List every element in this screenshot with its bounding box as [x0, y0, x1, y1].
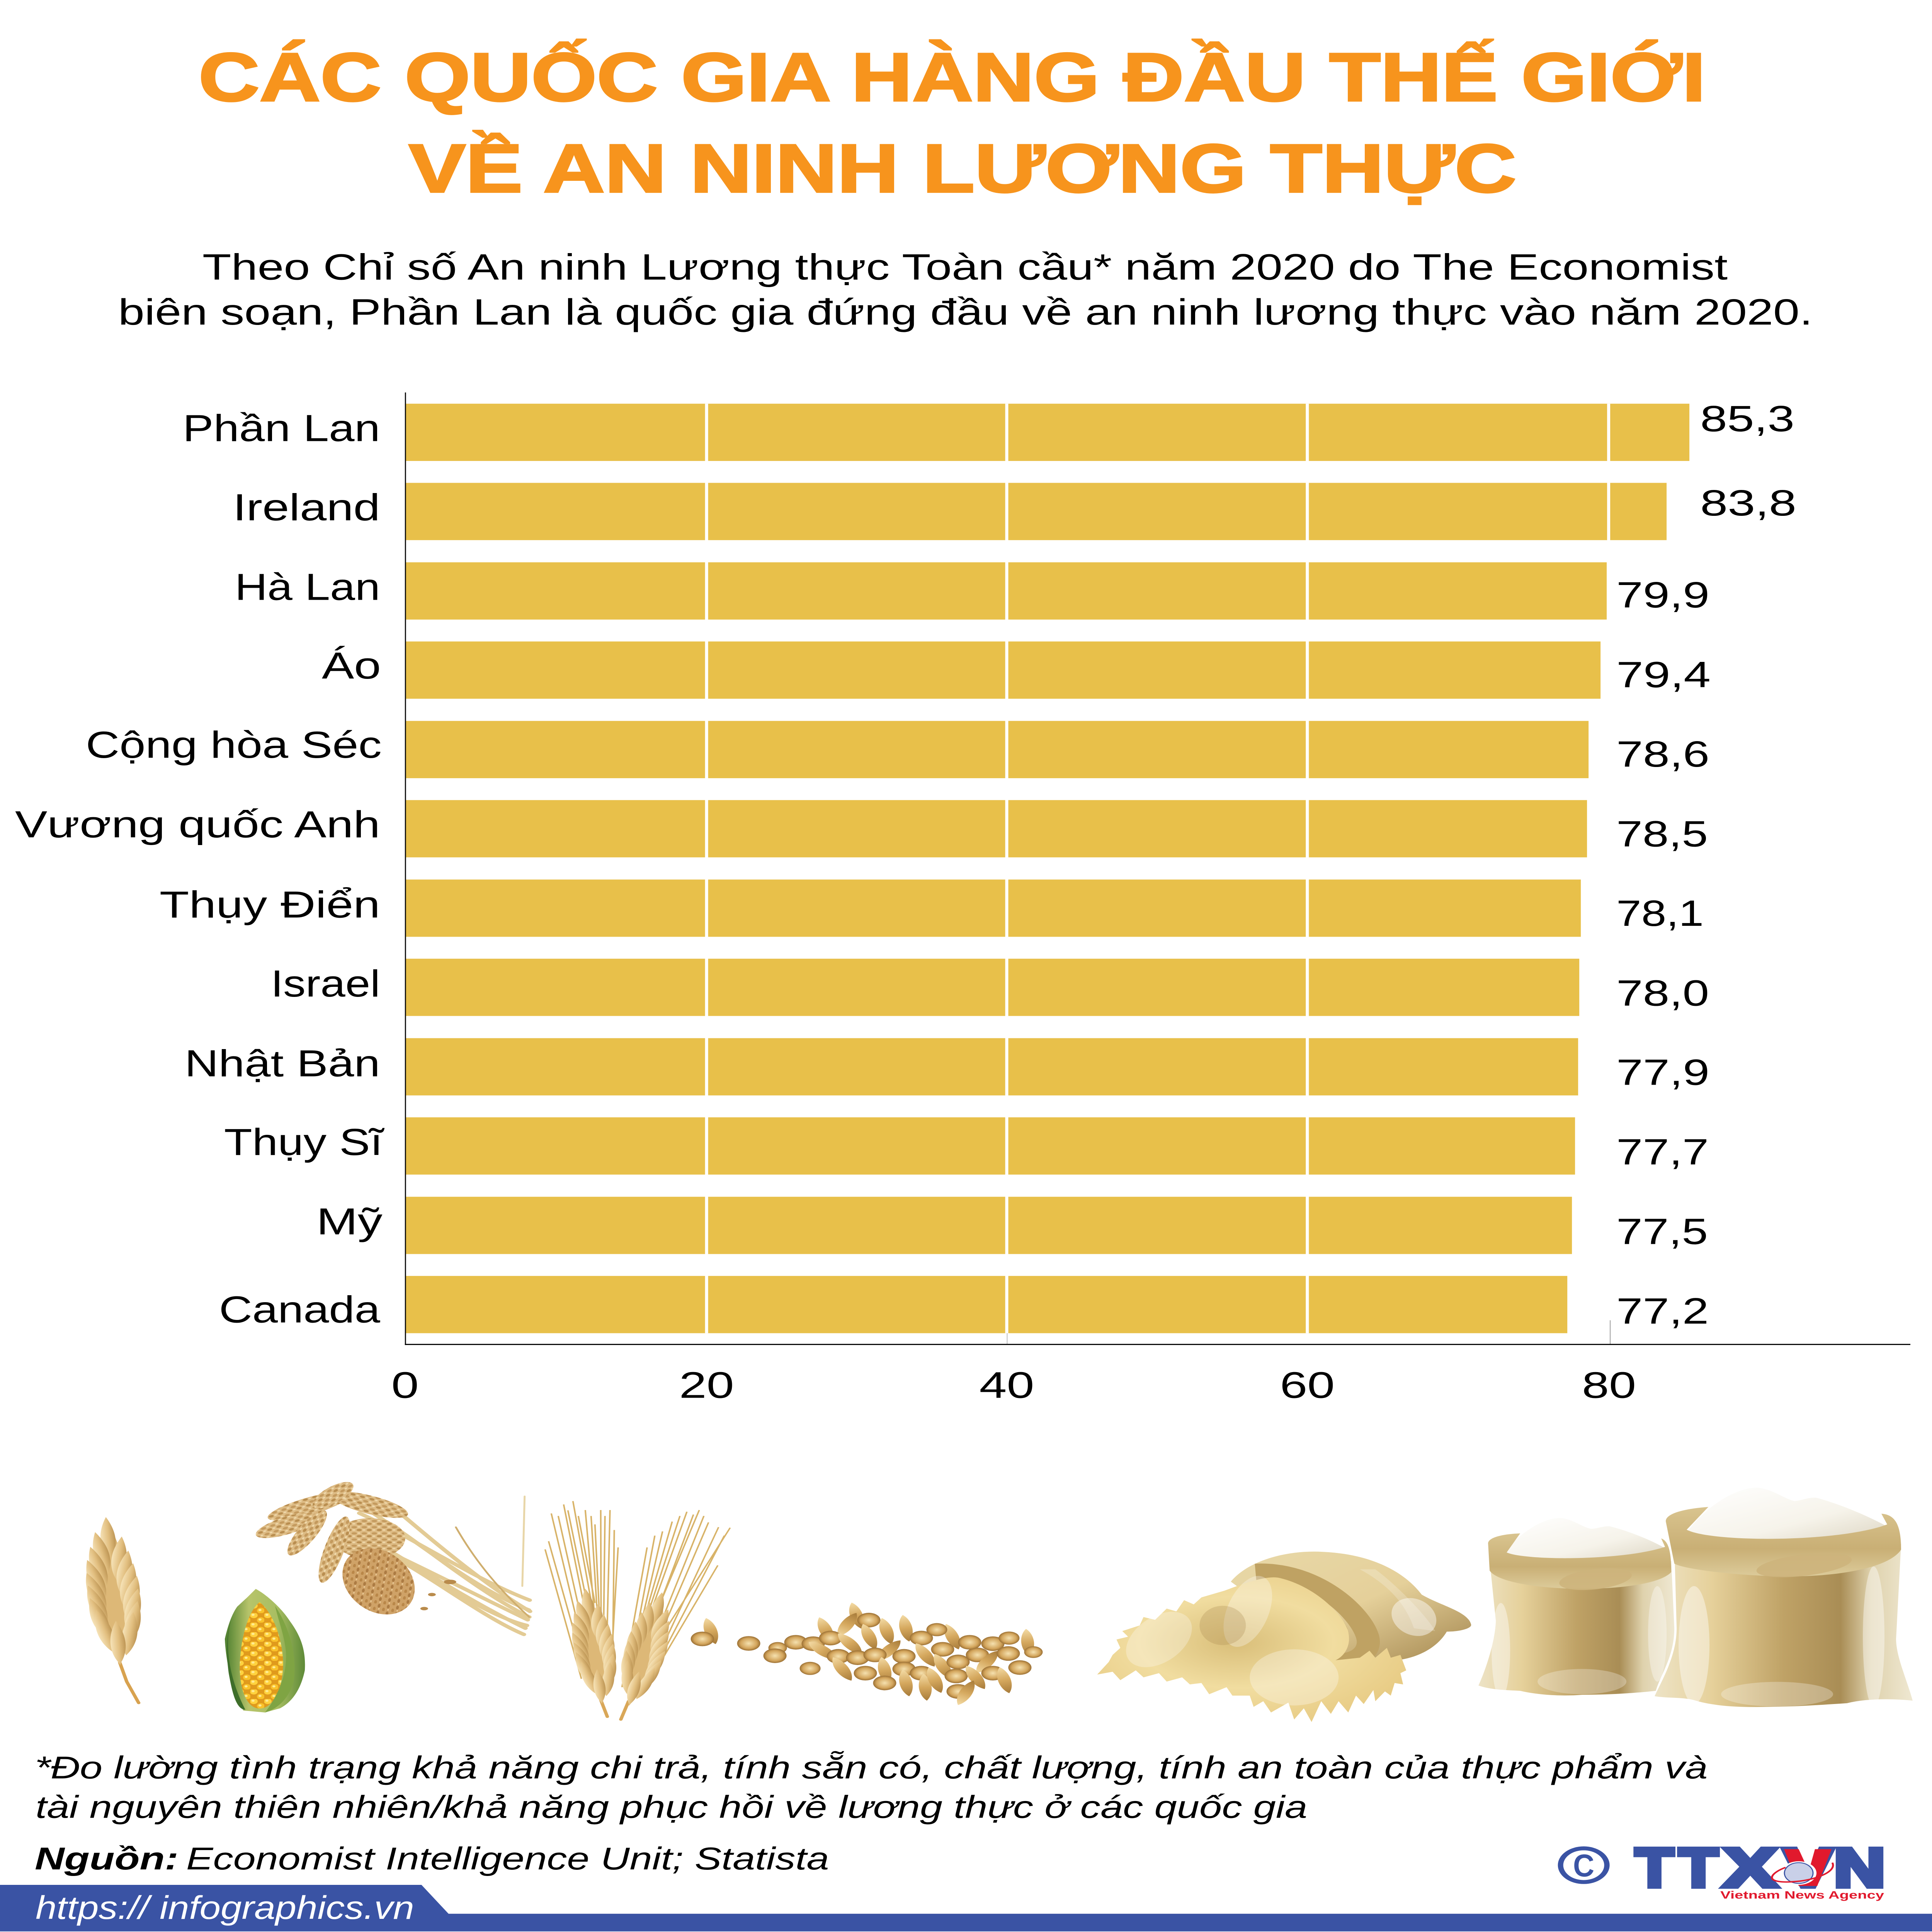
- x axis tick labels: 0: [391, 1365, 419, 1406]
- footer url: https:// infographics.vn: [36, 1889, 414, 1926]
- value labels: 78,5: [1616, 814, 1708, 854]
- country labels: Cộng hòa Séc: [86, 724, 382, 766]
- bar chart: food security index by country: [15, 393, 1910, 1406]
- footnote text block: *Đo lường tình trạng khả năng chi trả, tính sẵn có, chất lượng, tính an toàn của thực phẩm và: [35, 1750, 1708, 1785]
- country labels: Vương quốc Anh: [15, 803, 380, 845]
- country labels: [15, 407, 384, 1330]
- logo: TTXVN Vietnam News Agency: T: [1635, 1837, 1673, 1898]
- value labels: 79,4: [1616, 655, 1711, 695]
- illustration: flour bag small: [1478, 1518, 1674, 1699]
- value labels: 77,5: [1616, 1211, 1708, 1252]
- subtitle text block: Theo Chỉ số An ninh Lương thực Toàn cầu* năm 2020 do The Economist: [202, 247, 1728, 287]
- gridlines: [705, 404, 1610, 1333]
- axes and ticks: [405, 393, 1910, 1345]
- illustration: scattered grains: [691, 1601, 1043, 1707]
- footnote text block: [35, 1750, 1708, 1825]
- illustration: corn cob: [225, 1589, 305, 1713]
- x axis tick labels: [391, 1365, 1636, 1406]
- country labels: Hà Lan: [235, 566, 380, 608]
- subtitle text block: biên soạn, Phần Lan là quốc gia đứng đầu về an ninh lương thực vào năm 2020.: [118, 292, 1813, 333]
- value labels: 85,3: [1700, 398, 1794, 439]
- logo: TTXVN Vietnam News Agency: Vietnam News Agency: [1720, 1889, 1884, 1901]
- source text: Economist Intelligence Unit; Statista: [186, 1841, 829, 1876]
- value labels: 77,9: [1616, 1052, 1709, 1093]
- country labels: Mỹ: [316, 1200, 383, 1242]
- illustration: wheat bundle with grain pile: [251, 1478, 530, 1634]
- country labels: Ireland: [233, 486, 380, 528]
- country labels: Israel: [271, 963, 380, 1005]
- footer band: [0, 1885, 1932, 1932]
- title: [199, 39, 1706, 207]
- title: CÁC QUỐC GIA HÀNG ĐẦU THẾ GIỚI: [199, 39, 1706, 116]
- logo: TTXVN Vietnam News Agency: T: [1679, 1837, 1718, 1898]
- country labels: Canada: [219, 1289, 381, 1330]
- source text: Nguồn:: [35, 1841, 179, 1876]
- country labels: Nhật Bản: [185, 1042, 380, 1084]
- value labels: 78,6: [1616, 734, 1709, 775]
- country labels: Phần Lan: [183, 407, 380, 449]
- logo: TTXVN Vietnam News Agency: N: [1834, 1837, 1885, 1898]
- country labels: Thụy Sĩ: [224, 1121, 384, 1163]
- subtitle text block: [118, 247, 1813, 333]
- logo emblem: red chevron and globe: [1772, 1849, 1833, 1886]
- illustration: flour bag large: [1655, 1488, 1913, 1707]
- logo: TTXVN Vietnam News Agency: X: [1723, 1837, 1777, 1898]
- value labels: 78,1: [1616, 893, 1704, 934]
- title: VỀ AN NINH LƯƠNG THỰC: [409, 130, 1516, 207]
- value labels: 77,2: [1616, 1291, 1709, 1332]
- illustration: spilled rice sack: [1097, 1552, 1471, 1722]
- x axis tick labels: 20: [679, 1365, 734, 1406]
- value labels: 83,8: [1700, 483, 1796, 524]
- country labels: Thụy Điển: [160, 883, 380, 925]
- bars: [406, 404, 1689, 1333]
- copyright icon: C: [1573, 1848, 1594, 1883]
- country labels: Áo: [322, 645, 381, 687]
- value labels: [1616, 398, 1796, 1332]
- x axis tick labels: 60: [1280, 1365, 1335, 1406]
- value labels: 78,0: [1616, 973, 1709, 1014]
- logo: TTXVN Vietnam News Agency: V: [1783, 1837, 1833, 1898]
- x axis tick labels: 40: [979, 1365, 1034, 1406]
- illustration: barley stalks: [545, 1501, 730, 1719]
- value labels: 77,7: [1616, 1132, 1709, 1172]
- value labels: 79,9: [1616, 575, 1709, 616]
- copyright icon: [1561, 1848, 1607, 1883]
- logo: TTXVN Vietnam News Agency: [1635, 1837, 1885, 1901]
- footnote text block: tài nguyên thiên nhiên/khả năng phục hồi về lương thực ở các quốc gia: [36, 1789, 1307, 1825]
- illustration: wheat ear: [74, 1515, 153, 1703]
- x axis tick labels: 80: [1582, 1365, 1636, 1406]
